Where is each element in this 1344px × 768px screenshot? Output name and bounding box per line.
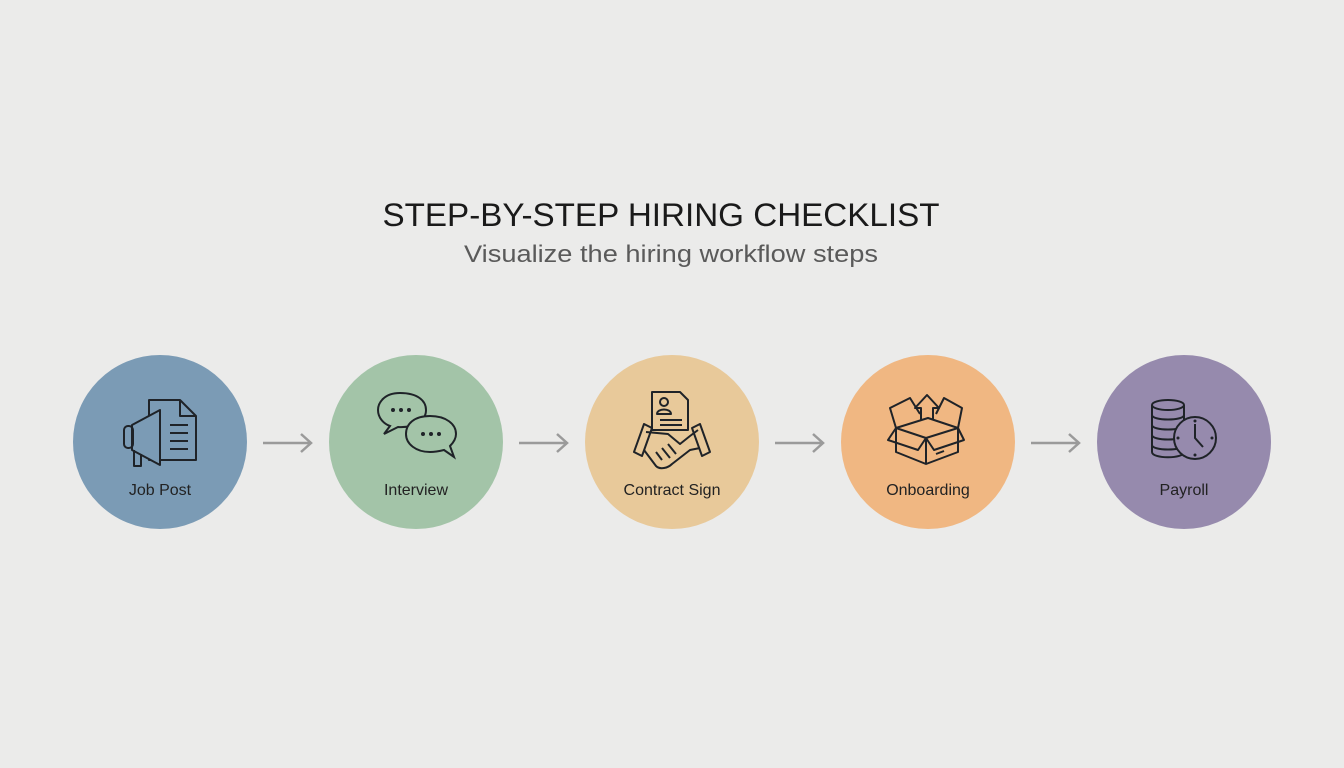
icon: contract handshake xyxy=(634,392,710,468)
arrow 3 xyxy=(775,434,823,452)
title: STEP-BY-STEP HIRING CHECKLIST xyxy=(382,197,940,233)
icon: open box with arrow xyxy=(888,395,964,464)
arrow 1 xyxy=(263,434,311,452)
arrow 4 xyxy=(1031,434,1079,452)
step: Job Post xyxy=(73,355,247,529)
icon: coins and clock xyxy=(1152,400,1216,459)
icon: megaphone with document xyxy=(124,400,196,466)
arrow 2 xyxy=(519,434,567,452)
label: Job Post xyxy=(129,482,192,499)
label: Onboarding xyxy=(886,482,970,499)
label: Contract Sign xyxy=(624,482,720,499)
step: Onboarding xyxy=(841,355,1015,529)
label: Interview xyxy=(384,482,448,499)
subtitle: Visualize the hiring workflow steps xyxy=(464,241,878,268)
step: Interview xyxy=(329,355,503,529)
label: Payroll xyxy=(1160,482,1208,499)
step: Payroll xyxy=(1097,355,1271,529)
icon: speech bubbles xyxy=(378,393,456,457)
step: Contract Sign xyxy=(585,355,759,529)
